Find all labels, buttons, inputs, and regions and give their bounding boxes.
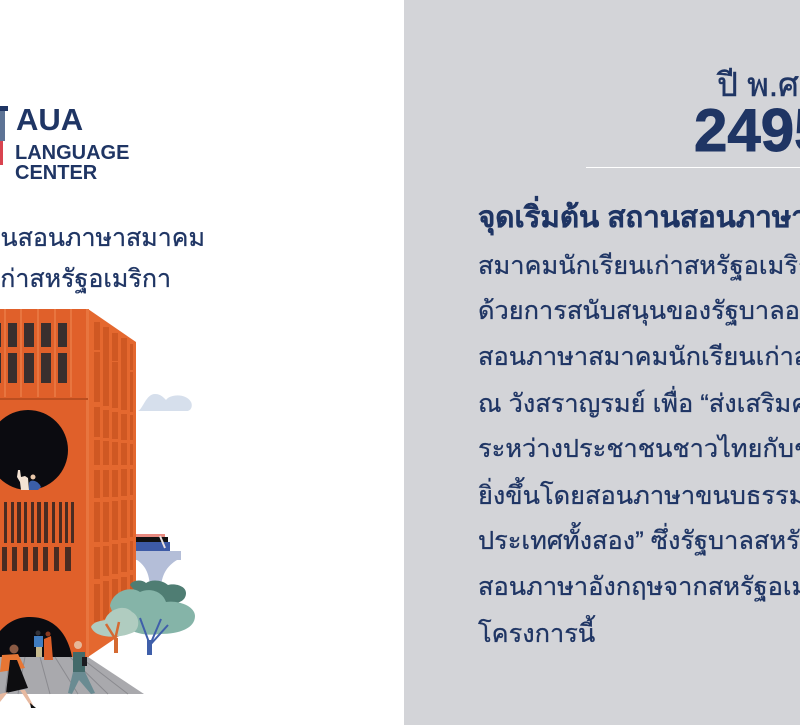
viaduct bbox=[136, 551, 181, 590]
body text: โครงการนี้ bbox=[478, 620, 595, 648]
logo wordmark Language Center bbox=[15, 142, 129, 184]
heading: institute name bbox=[0, 224, 205, 294]
people in opening bbox=[17, 470, 41, 490]
logo wordmark Language Center: CENTER bbox=[15, 162, 97, 184]
plaza bbox=[0, 657, 144, 694]
logo emblem bbox=[0, 106, 8, 165]
logo wordmark AUA: AUA bbox=[16, 102, 83, 137]
side windows bbox=[94, 322, 133, 622]
people in entrance bbox=[34, 630, 53, 660]
illustration: orange building with people, train and trees bbox=[0, 309, 195, 708]
train bbox=[136, 534, 170, 551]
slat windows upper bbox=[4, 502, 74, 543]
divider bbox=[586, 167, 800, 168]
round opening bbox=[0, 410, 68, 490]
building side face bbox=[88, 309, 136, 657]
small tree bbox=[91, 608, 138, 653]
arched entrance bbox=[0, 617, 72, 657]
slat windows lower bbox=[2, 547, 71, 571]
body text bbox=[478, 252, 800, 648]
logo: AUA Language Center bbox=[0, 102, 129, 184]
walking man bbox=[68, 641, 95, 694]
back trees bbox=[130, 581, 186, 603]
logo wordmark Language Center: LANGUAGE bbox=[15, 142, 129, 164]
building front face bbox=[0, 309, 88, 657]
walking woman bbox=[0, 644, 36, 708]
panel: grey text background bbox=[404, 0, 800, 725]
cloud bbox=[138, 394, 192, 411]
large tree bbox=[110, 589, 195, 655]
top windows bbox=[0, 323, 67, 383]
